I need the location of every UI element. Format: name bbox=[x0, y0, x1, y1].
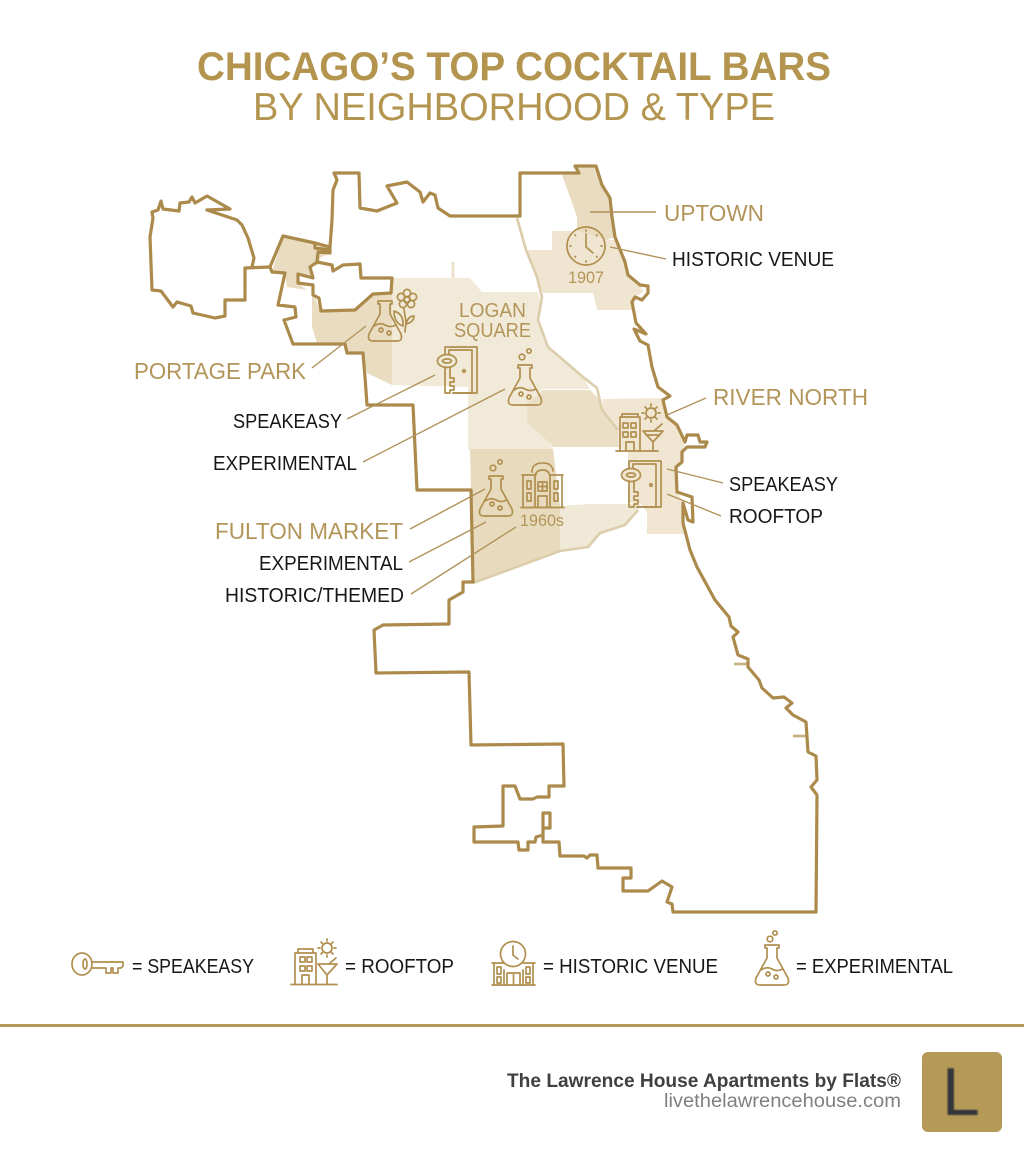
label: experimental, Logan Square: EXPERIMENTAL bbox=[213, 453, 357, 475]
label: River North: RIVER NORTH bbox=[713, 384, 868, 410]
footer text: livethelawrencehouse.com bbox=[664, 1091, 901, 1112]
legend text: rooftop: = ROOFTOP bbox=[345, 956, 454, 978]
label: Portage Park: PORTAGE PARK bbox=[134, 358, 307, 384]
label: speakeasy, River North: SPEAKEASY bbox=[729, 474, 838, 496]
label: 1960s: 1960s bbox=[520, 511, 564, 530]
title bbox=[197, 45, 831, 129]
legend icon: historic venue bbox=[492, 942, 535, 985]
label: 1907: 1907 bbox=[568, 268, 604, 287]
label: rooftop: ROOFTOP bbox=[729, 506, 823, 528]
title: CHICAGO’S TOP COCKTAIL BARS bbox=[197, 45, 831, 89]
map outline bbox=[150, 166, 817, 912]
leader lines bbox=[312, 212, 723, 594]
icon: sun, building and cocktail, River North bbox=[616, 404, 663, 451]
icon: flask, Fulton Market bbox=[480, 460, 512, 516]
area: Uptown south bbox=[526, 231, 643, 310]
area: Fulton Market bbox=[470, 449, 560, 583]
area: Belmont Cragin edge bbox=[272, 236, 330, 290]
legend icon: key bbox=[72, 953, 123, 975]
legend bbox=[72, 931, 953, 985]
legend text: speakeasy: = SPEAKEASY bbox=[132, 956, 254, 978]
legend icon: experimental bbox=[756, 931, 788, 985]
city boundary bbox=[270, 166, 817, 912]
area: River North bbox=[602, 398, 685, 534]
legend text: historic venue: = HISTORIC VENUE bbox=[543, 956, 718, 978]
label: Logan: LOGAN bbox=[459, 300, 526, 322]
icon: historic building, Fulton Market bbox=[521, 463, 564, 508]
enclave bbox=[298, 243, 392, 311]
icon: clock, Uptown bbox=[567, 227, 605, 265]
label: speakeasy, Logan Square: SPEAKEASY bbox=[233, 411, 342, 433]
label: Uptown: UPTOWN bbox=[664, 200, 764, 226]
logo bbox=[922, 1052, 1002, 1132]
area: West Town bbox=[527, 390, 618, 447]
title: BY NEIGHBORHOOD & TYPE bbox=[253, 86, 775, 129]
icon: key and door, River North bbox=[622, 461, 661, 507]
area: Logan Square bbox=[392, 278, 590, 450]
O'Hare loop bbox=[150, 196, 270, 318]
river lines bbox=[453, 218, 807, 736]
area: Portage Park bbox=[312, 287, 392, 385]
footer rule bbox=[0, 1024, 1024, 1027]
icon: flask, Logan Square bbox=[508, 349, 542, 405]
logo: L bbox=[942, 1054, 980, 1130]
neighborhood shading bbox=[272, 166, 685, 583]
legend icon: rooftop bbox=[291, 939, 337, 984]
label: experimental, Fulton Market: EXPERIMENTAL bbox=[259, 553, 403, 575]
label: historic themed: HISTORIC/THEMED bbox=[225, 585, 404, 607]
map labels bbox=[134, 200, 868, 607]
label: Fulton Market: FULTON MARKET bbox=[215, 518, 403, 544]
legend text: experimental: = EXPERIMENTAL bbox=[796, 956, 953, 978]
label: historic venue: HISTORIC VENUE bbox=[672, 249, 834, 271]
small enclave bbox=[543, 813, 550, 835]
icon: key and door, Logan Square bbox=[438, 347, 477, 393]
footer text: The Lawrence House Apartments by Flats® bbox=[507, 1071, 901, 1092]
footer text bbox=[507, 1071, 901, 1112]
icon: flask and flower, Portage Park bbox=[368, 289, 417, 341]
area: south of Fulton bbox=[560, 504, 640, 550]
area: Uptown north bbox=[562, 166, 615, 240]
label: Square: SQUARE bbox=[454, 320, 531, 342]
